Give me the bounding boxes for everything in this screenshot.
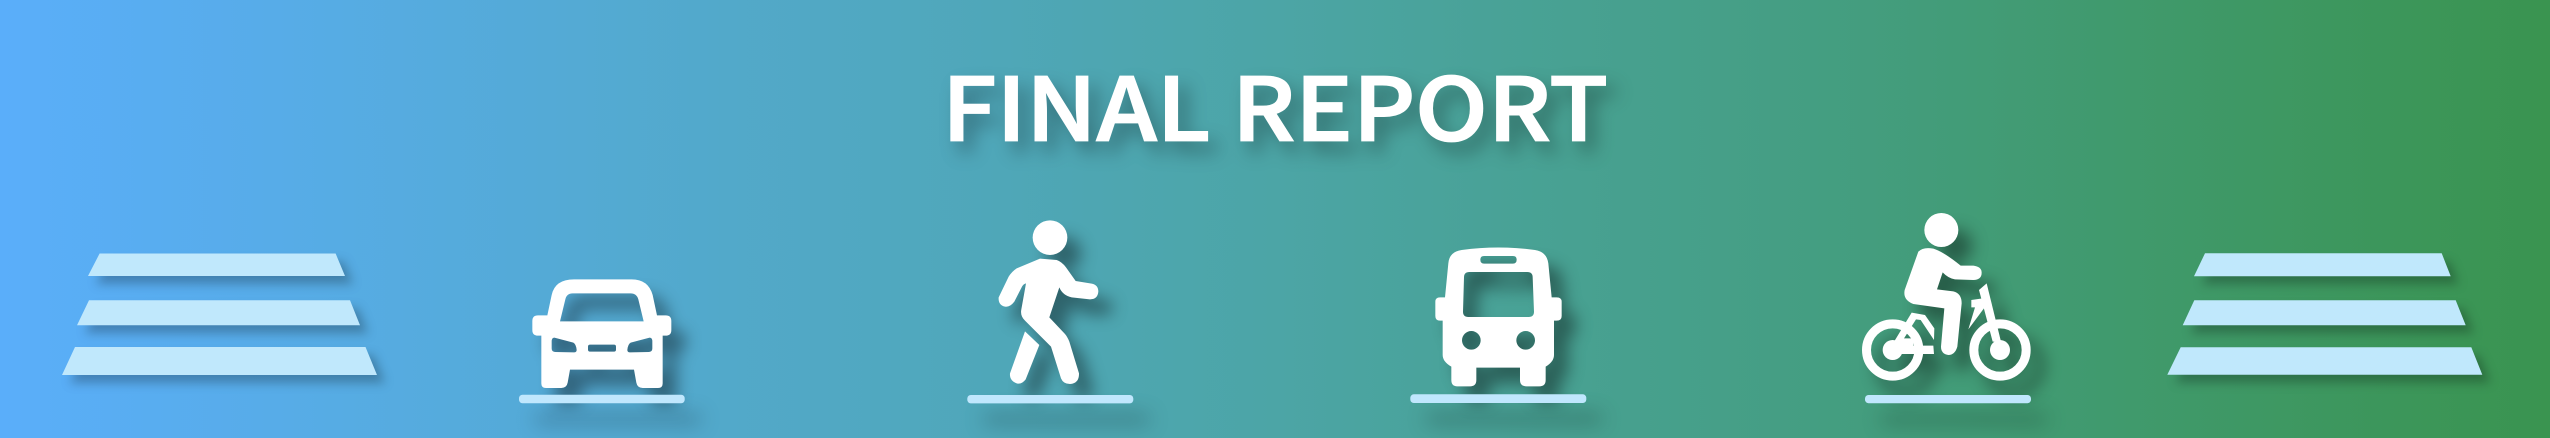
- icon: pedestrian: [999, 220, 1098, 384]
- pedestrian ground line: [967, 395, 1133, 403]
- car ground line: [519, 395, 685, 403]
- icon: left road crossing stripes: [62, 254, 377, 375]
- icon: bus: [1435, 247, 1562, 386]
- cyclist ground line: [1865, 395, 2031, 403]
- icon: car: [532, 279, 671, 388]
- bus ground line: [1410, 394, 1586, 403]
- icon: cyclist: [1866, 213, 2026, 376]
- icon: right road crossing stripes: [2167, 253, 2482, 375]
- title: FINAL REPORT: [942, 41, 1608, 167]
